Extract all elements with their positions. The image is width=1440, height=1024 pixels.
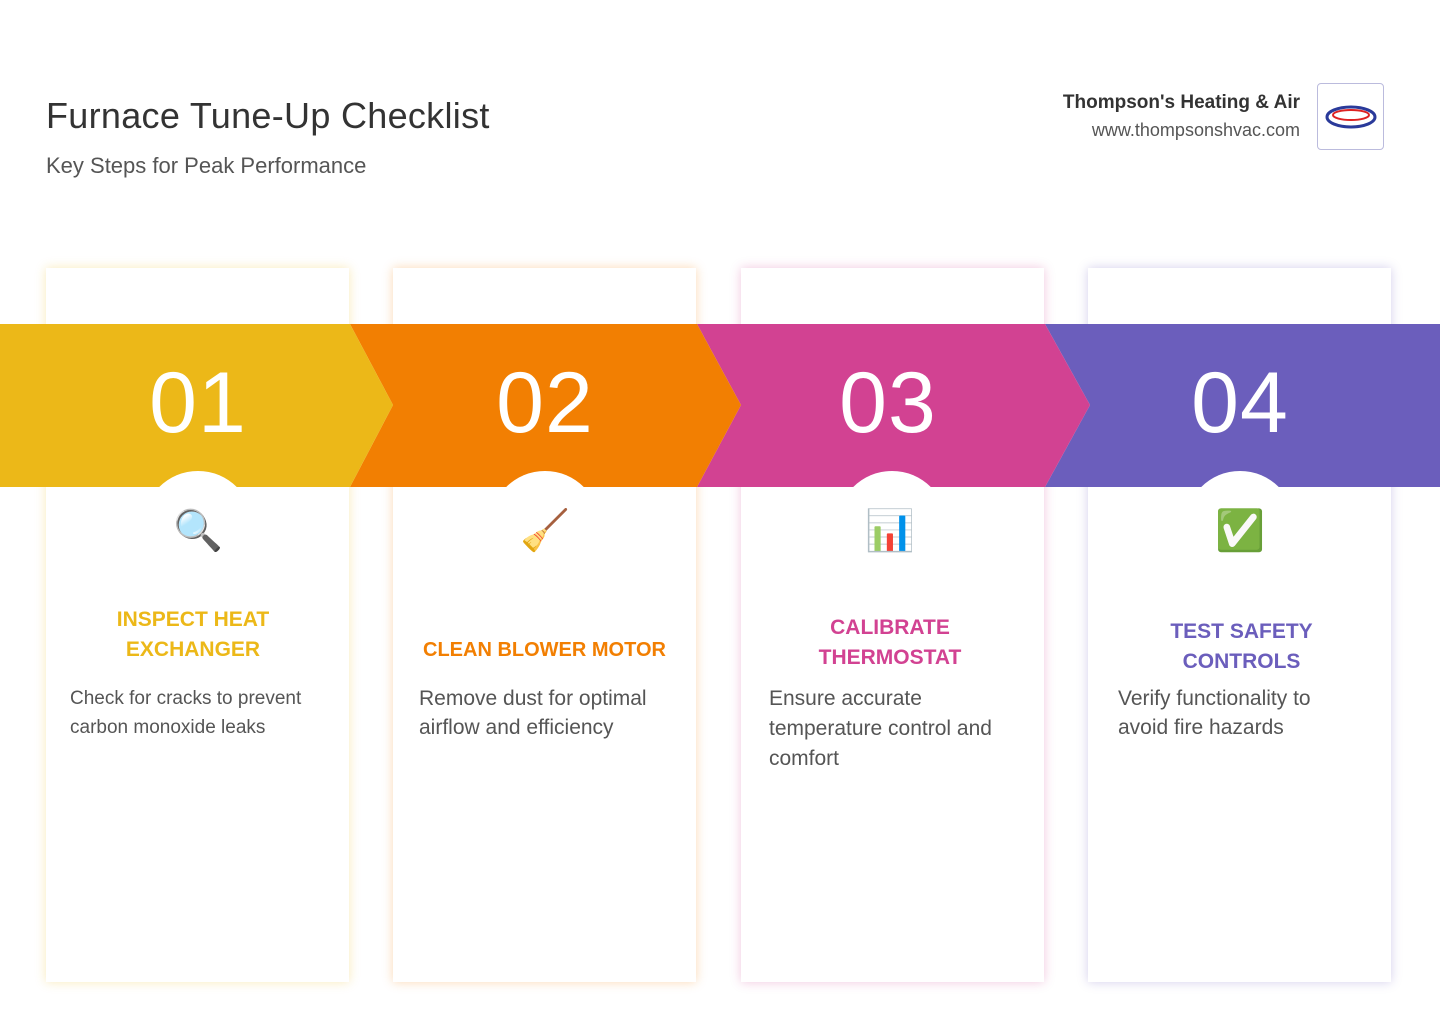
arrow band [0, 324, 1440, 487]
icon: broom: 🧹 [520, 509, 570, 553]
card 3 [741, 268, 1044, 982]
step 4 title: CONTROLS [1183, 650, 1300, 673]
icon: check: ✅ [1215, 509, 1265, 553]
step 4 title: TEST SAFETY [1170, 620, 1313, 643]
step 2 text: Remove dust for optimal airflow and efficiency [419, 687, 647, 739]
logo [1317, 83, 1384, 150]
brand block [1063, 83, 1384, 150]
step 3 title: CALIBRATE [830, 616, 950, 639]
brand url: www.thompsonshvac.com [1092, 120, 1300, 140]
step 1 text: Check for cracks to prevent carbon monoxide leaks [70, 688, 301, 738]
step 1 title: INSPECT HEAT [117, 608, 269, 631]
subtitle: Key Steps for Peak Performance [46, 153, 366, 178]
number 04: 04 [1191, 355, 1289, 451]
step 3 text: Ensure accurate temperature control and comfort [769, 687, 992, 770]
card 1 [46, 268, 349, 982]
icon: magnifier: 🔍 [173, 509, 223, 553]
number 03: 03 [839, 355, 937, 451]
step 1 title: EXCHANGER [126, 638, 260, 661]
icon: chart: 📊 [865, 509, 915, 553]
card 2 [393, 268, 696, 982]
step 3 title: THERMOSTAT [819, 646, 961, 669]
number 02: 02 [496, 355, 594, 451]
step 4 title [1170, 620, 1313, 673]
title: Furnace Tune-Up Checklist [46, 95, 490, 136]
step 1 title [117, 608, 269, 661]
step 3 title [818, 616, 962, 669]
step 4 text: Verify functionality to avoid fire hazards [1118, 687, 1311, 739]
step 2 title: CLEAN BLOWER MOTOR [423, 639, 666, 661]
number 01: 01 [149, 355, 247, 451]
brand name: Thompson's Heating & Air [1063, 92, 1300, 113]
card 4 [1088, 268, 1391, 982]
